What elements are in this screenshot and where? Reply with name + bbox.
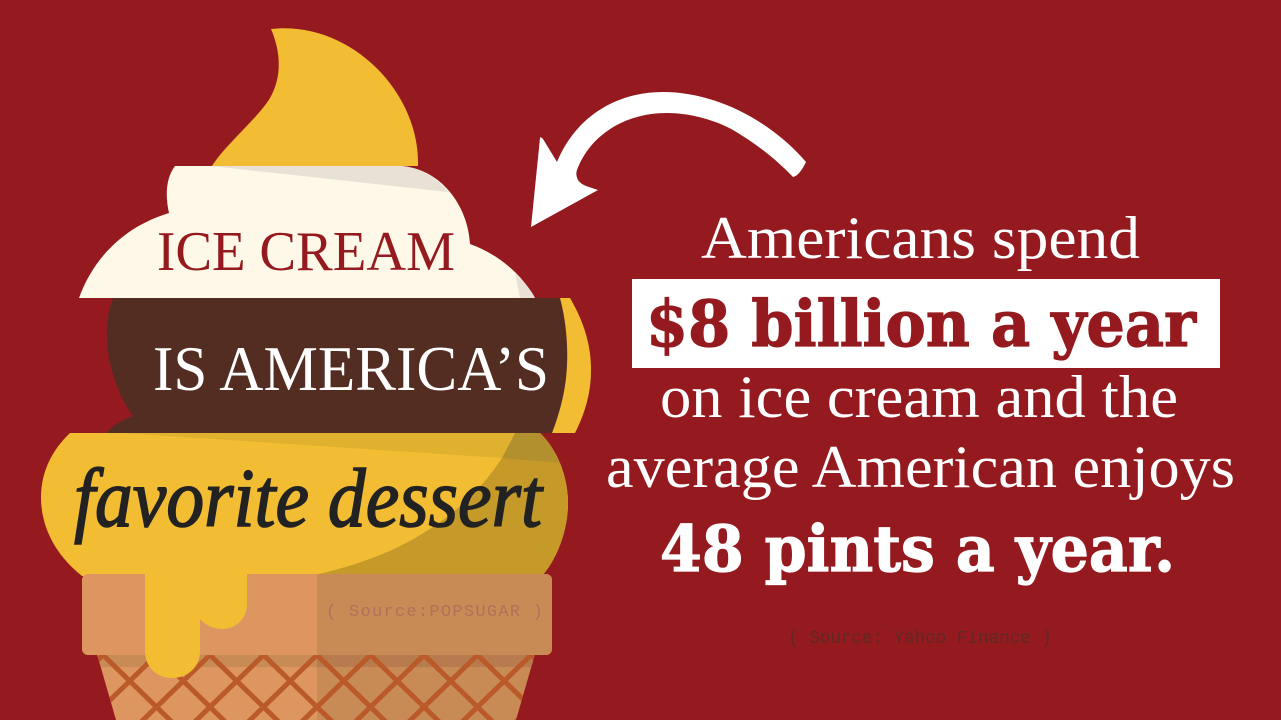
text: average american enjoys: average American enjoys	[606, 434, 1235, 500]
source: yahoo finance: ( Source: Yahoo Finance )	[788, 629, 1052, 649]
text: americans spend: Americans spend	[701, 205, 1140, 271]
stat: 8 billion a year: $8 billion a year	[646, 287, 1197, 362]
headline: favorite dessert: favorite dessert	[74, 452, 544, 545]
stat: 48 pints a year: 48 pints a year.	[660, 512, 1175, 587]
chocolate layer	[106, 298, 567, 433]
headline: is america's: IS AMERICA’S	[153, 333, 549, 404]
cone wafer	[97, 655, 535, 720]
curved arrow	[531, 92, 806, 227]
cone rim	[82, 574, 552, 655]
melting drips	[145, 570, 247, 678]
yellow sliver behind brown layer	[552, 298, 591, 433]
highlight box	[632, 279, 1220, 368]
swirl tip	[212, 28, 418, 166]
text: on ice cream and the: on ice cream and the	[660, 364, 1178, 430]
cream layer	[79, 166, 535, 298]
yellow scoop	[30, 430, 580, 580]
source: popsugar: ( Source:POPSUGAR )	[326, 603, 543, 622]
ice cream cone illustration	[30, 28, 601, 720]
stat text block	[606, 205, 1235, 587]
headline: ice cream: ICE CREAM	[157, 221, 455, 283]
